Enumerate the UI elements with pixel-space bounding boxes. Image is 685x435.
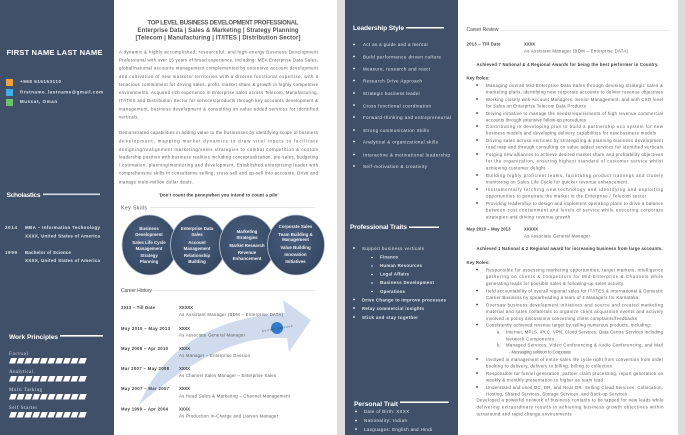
circle: business development: Management — [136, 246, 163, 251]
key roles list: Providing leadership to design and implement operating plans to drive a balance — [486, 201, 664, 206]
circle: corporate sales: Value Building — [280, 245, 311, 250]
role block: assistant manager: 2013 – Till Date — [466, 42, 501, 46]
key roles list: Carrier Business by spearheading a team of 4 Managers for Karnataka — [486, 295, 639, 300]
circle: business development: Strategy — [140, 253, 158, 258]
circle: marketing strategies: Revenue — [238, 250, 257, 255]
list: professional traits: Business Development — [380, 280, 435, 285]
key roles list: business models and developing delivery capabilities for new business models — [486, 130, 656, 136]
key skills circles — [122, 215, 324, 275]
key roles list: for Sales on Enterprise Telecom Data Products — [486, 104, 586, 108]
contact details: Muscat, Oman — [20, 99, 57, 104]
heading: professional traits — [350, 224, 439, 231]
career history timeline: XXXXX — [179, 305, 193, 310]
key roles list: Managed Services, Video Conferencing & Audio Conferencing, and Mail — [506, 342, 663, 348]
heading: personal trait: Personal Trait — [354, 401, 399, 408]
profile summary paragraph 1: tenacious commitment for driving sales, profit, market share & growth in highly competitive — [119, 82, 319, 87]
key roles list — [476, 83, 664, 220]
role block: assistant manager: Key Roles: — [466, 76, 490, 80]
key roles list: Developed a powerful network of business contacts to be tapped for new leads while — [476, 398, 664, 402]
key roles list: a. — [497, 330, 500, 334]
key roles list: Instrumentally fetching new technology and identifying and exploiting — [486, 187, 664, 192]
key roles list: Managing overall Mid-Enterprise Data Sales through devising strategic sales & — [486, 83, 663, 88]
career history timeline: May 2010 – May 2013 — [121, 326, 171, 331]
role block: associate general manager: Key Roles: — [466, 260, 490, 265]
key roles list: accounts through extensive follow-up procedures — [486, 118, 586, 122]
circle: corporate sales — [268, 215, 324, 275]
list: leadership style: Act as a guide and a mentor — [363, 42, 429, 47]
career history timeline: As Assistant Manager (BDM – Enterprise DATA) — [179, 312, 284, 317]
key roles list: Oversaw business development initiatives and source and created marketing — [486, 302, 664, 308]
key roles list: - Messaging solution to Corporate — [509, 350, 572, 354]
key roles list: for the organization, ensuring highest standard of customer service whilst — [486, 158, 664, 164]
title block — [136, 20, 300, 42]
profile summary paragraph 2: development, mapping market dynamics to draw vital inputs to facilitate — [119, 138, 319, 144]
list: leadership style: Cross functional coordination — [363, 104, 432, 108]
key roles list: achieving customer delight — [486, 166, 546, 170]
circle: enterprise data sales: Sales — [191, 232, 203, 237]
career history timeline: As Production In-Charge and Liaison Manager — [179, 414, 279, 418]
key roles list: b. — [497, 342, 500, 348]
key roles list: Network Components — [506, 336, 554, 342]
key roles list: monitoring on Sales Life Cycle for quicker revenue enhancement — [486, 180, 628, 184]
list: leadership style: Interactive & motivational leadership — [363, 152, 451, 158]
role block: associate general manager — [466, 226, 664, 416]
profile summary paragraph 1: management, business development & consulting on value added services for identified — [119, 106, 319, 112]
profile summary paragraph 1: A dynamic & highly accomplished, resourceful, and high-energy Business Development — [119, 50, 319, 54]
scholastics entries: 1999 — [5, 250, 18, 255]
profile summary paragraph 2 — [119, 130, 319, 184]
list: personal trait: Nationality: Indian — [364, 418, 408, 423]
career history timeline: As Head Sales & Marketing – Channel Management — [179, 394, 291, 398]
key roles list: strategies and driving revenue growth — [486, 214, 571, 220]
list: professional traits: Operations — [380, 289, 406, 294]
heading: career history: Career History — [121, 288, 152, 294]
list: professional traits: Support business verticals — [362, 246, 425, 251]
key roles list — [476, 268, 664, 416]
key roles list: Responsible for funnel generation, partner claim processing, report generation on — [486, 371, 664, 376]
career history timeline: XXXX — [179, 386, 190, 391]
list: personal trait — [355, 409, 432, 432]
contact details — [6, 79, 103, 106]
heading: professional traits: Professional Traits — [350, 224, 407, 231]
list: professional traits: Stick and stay together — [362, 315, 418, 320]
career history timeline: May 2008 – Apr 2010 — [121, 346, 169, 351]
profile summary paragraph 1: IT/ITES and Distribution Sector for services/products through key accounts development & — [119, 98, 318, 103]
profile summary paragraph 2: / estimation, planning/monitoring and development. Established enterprising leader with — [119, 162, 319, 168]
arrow: career progression — [139, 300, 311, 405]
profile summary paragraph 1: and cultivation of new markets/ territories with a diverse functional expertise, with a — [119, 74, 319, 79]
circle: corporate sales: Innovation — [284, 252, 307, 257]
key roles list: road map and through consulting on value added services for identified verticals — [486, 144, 663, 150]
key roles list: opportunities to penetrate the market in the Enterprise / Telecom sector — [486, 194, 647, 198]
circle: marketing strategies: Strategies — [236, 235, 258, 240]
list: leadership style — [353, 42, 451, 169]
career history timeline: XXXX — [179, 346, 190, 351]
contact details: +968 515153110 — [20, 79, 62, 84]
scholastics entries: XXXX, United States of America — [25, 234, 101, 238]
work principles rating bars: Multi Tasking — [9, 388, 42, 393]
list: leadership style: Research Drive Approach — [363, 78, 423, 84]
circle: enterprise data sales: Building — [188, 259, 206, 264]
list: professional traits: Human Resources — [380, 263, 423, 268]
list: professional traits: Finance — [380, 254, 399, 260]
circle: enterprise data sales: Enterprise Data — [181, 226, 214, 231]
title block: TOP LEVEL BUSINESS DEVELOPMENT PROFESSIONAL — [148, 20, 299, 26]
role block: assistant manager — [466, 42, 664, 220]
circle: business development: Planning — [140, 259, 159, 264]
role block: associate general manager: XXXXX — [524, 226, 538, 232]
scholastics entries: XXXX, United States of America — [25, 258, 101, 263]
career history timeline: As Associate General Manager — [179, 332, 246, 338]
key roles list: Driving sales across verticals by strategizing & planning business development — [486, 138, 664, 143]
key roles list: Building highly proficient teams, facilitating product trainings and closely — [486, 173, 664, 178]
key roles list: Working closely with Account Managers, Senior Management, and with CXO level — [486, 97, 663, 102]
circle: enterprise data sales: Management — [184, 246, 211, 251]
profile summary paragraph 2: Demonstrated capabilities in adding value to the businesses by identifying scope of business — [119, 130, 318, 135]
profile summary paragraph 2: manage multi-million dollar deals. — [119, 180, 193, 184]
circle: business development — [122, 215, 177, 275]
profile summary paragraph 2: designing/realignment marketing/sales strategies to combat competition & custom — [119, 147, 318, 152]
list: leadership style: Measure, research and react — [363, 66, 431, 72]
circle: corporate sales: Corporate Sales — [279, 224, 313, 229]
circle: business development: Business — [139, 226, 159, 231]
career history timeline: May 1999 – Apr 2004 — [121, 406, 169, 412]
career history timeline: May 2007 – Mar 2007 — [121, 386, 170, 391]
career history timeline: 2013 – Till Date — [121, 305, 156, 310]
role block: associate general manager: As Associate General Manager — [524, 234, 591, 238]
list: leadership style: Analytical & organizational skills — [363, 140, 439, 144]
list: leadership style: Strategic business leader — [363, 91, 421, 96]
quote: 'Don't count the pennywhen you intend to count a pile' — [158, 192, 278, 198]
key roles list: Driving initiative to manage the needs/requirements of high revenue commercial — [486, 111, 663, 116]
list: professional traits — [353, 246, 447, 320]
profile summary paragraph 1: Professional with over 15 years of broad experience, including: MEA Enterprise Data Sales, — [119, 58, 318, 62]
list: leadership style: Forward-thinking and entrepreneurial — [363, 115, 451, 120]
heading: personal trait — [354, 401, 449, 408]
career history timeline: XXXX — [179, 406, 190, 412]
work principles rating bars — [9, 352, 87, 418]
work principles rating bars: Factual — [9, 352, 29, 357]
title block: Enterprise Data | Sales & Marketing | Strategy Planning — [138, 28, 299, 34]
heading: leadership style — [353, 25, 444, 32]
circle: enterprise data sales: Relationship — [184, 253, 210, 258]
circle: corporate sales: Team Building & — [278, 232, 313, 237]
list: personal trait: Date of Birth: XXXX — [364, 409, 409, 414]
circle: enterprise data sales: Account — [188, 240, 206, 245]
key roles list: weekly & monthly presentation to higher as team lead — [486, 378, 604, 382]
profile summary paragraph 2: leadership position with business realities including conceptualization, pre-sales, budgeting — [119, 154, 319, 160]
panel: right page sidebar — [345, 0, 458, 435]
scholastics entries: 2014 — [5, 225, 18, 230]
heading: work principles — [9, 334, 103, 341]
circle: business development: Development — [135, 232, 163, 237]
list: leadership style: Strong communication Skills — [363, 128, 430, 133]
key roles list: Held accountability of overall regional sales for IT/ITES & International & Domestic — [486, 288, 664, 294]
circle: corporate sales: Initiatives — [285, 259, 306, 264]
key roles list: Hosting, Shared Services, Storage Services, and Back-up Services — [486, 392, 627, 396]
scholastics entries: MBA – Information Technology — [25, 225, 101, 230]
list: leadership style: Build performance driven culture — [363, 54, 442, 60]
profile summary paragraph 2: comprehensive skills in consultative selling, cross sell and up-sell into accounts, Drive and — [119, 170, 319, 176]
panel: left page sidebar — [0, 0, 114, 435]
contact details: firstname_lastname@gmail.com — [20, 90, 103, 94]
key roles list: Contributing in developing plan to build a partnership eco system for new — [486, 124, 664, 129]
key roles list: gathering on clients & competitors for Mid-Enterprise & Channels while — [486, 274, 664, 279]
career history timeline: As Manager – Enterprise Division — [179, 353, 251, 358]
career history timeline: XXXX — [179, 366, 190, 371]
list: professional traits: Relay commercial insights — [362, 306, 425, 311]
circle: marketing strategies — [220, 215, 274, 275]
heading: leadership style: Leadership Style — [353, 25, 404, 32]
key roles list: Internet, MPLS, IPLC, VPN, Cloud Services, Data Centre Services including — [506, 330, 664, 334]
work principles rating bars: Self Starter — [9, 406, 37, 411]
career history timeline — [121, 305, 291, 418]
circle: enterprise data sales — [170, 215, 226, 275]
key roles list: Involved in management of entire sales life cycle right from conversion from order — [486, 357, 664, 362]
work principles rating bars: Analytical — [9, 370, 34, 375]
circle: business development: Sales Life Cycle — [132, 240, 166, 245]
key roles list: marketing plans, identifying new corporate accounts to deliver revenue objectives — [486, 90, 663, 94]
icon: current position marker: Current Position — [261, 324, 293, 333]
profile summary paragraph 1 — [119, 50, 319, 120]
key roles list: Consistently achieved revenue target by selling numerous products, including: — [486, 322, 651, 328]
key roles list: Responsible for assessing marketing opportunities, target markets, intelligence — [486, 268, 664, 272]
circle: corporate sales: Management — [282, 237, 309, 242]
heading: scholastics: Scholastics — [6, 192, 41, 199]
key roles list: delivering extraordinary results in achieving business growth objectives within — [476, 404, 664, 410]
heading: career review: Career Review — [466, 27, 499, 33]
role block: assistant manager: As Assistant Manager (BDM – Enterprise DATA) — [524, 48, 629, 54]
list: personal trait: Languages: English and Hindi — [364, 427, 432, 432]
career history timeline: XXXX — [179, 326, 190, 331]
profile summary paragraph 1: environments. Acquired rich experience in Enterprise sales across Telecom, Manufacturing, — [119, 90, 318, 95]
key roles list: material and sales collaterals to organize client acquisition events and actively — [486, 309, 664, 314]
panel: right page main content — [458, 0, 678, 435]
achievement line: Achieved 7 National & 4 Regional Awards for being the best performer in Country. — [476, 62, 658, 67]
profile summary paragraph 1: global/national accounts management complemented by extensive account development — [119, 66, 319, 70]
circle: marketing strategies: Market Research — [229, 243, 265, 248]
achievement line: Achieved 1 National & 2 Regional award for increasing business from large accounts. — [476, 246, 662, 251]
key roles list: generating leads for possible sales & following-up sales activity — [486, 281, 624, 286]
key roles list: Understand and used DC, DR, and Near DR. Selling Cloud Services, Collocation, — [486, 385, 663, 390]
scholastics entries — [5, 225, 101, 263]
career history timeline: Mar 2007 – May 2008 — [121, 366, 170, 371]
list: professional traits: Drive Change to improve processes — [362, 298, 447, 302]
heading: scholastics — [6, 192, 100, 199]
key roles list: Forging new alliances to achieve desired market share and profitability objectives — [486, 152, 663, 157]
list: professional traits: Legal Affairs — [380, 272, 410, 276]
circle: marketing strategies: Marketing — [237, 229, 258, 234]
list: leadership style: Self-motivation & creativity — [363, 164, 428, 169]
name heading: FIRST NAME LAST NAME — [6, 48, 102, 57]
heading: work principles: Work Principles — [9, 334, 58, 341]
title block: [Telecom | Manufacturing | IT/ITES | Distribution Sector] — [136, 36, 300, 42]
career history timeline: As Channel Sales Manager – Enterprise Sales — [179, 373, 276, 378]
key roles list: between cost containment and levels of service while executing corporate — [486, 208, 664, 212]
role block: assistant manager: XXXX — [524, 42, 535, 46]
heading: key skills: Key Skills — [121, 206, 147, 212]
profile summary paragraph 1: verticals. — [119, 114, 139, 120]
key roles list: involved in policy discussions concerning client complaints/feedbacks — [486, 316, 637, 321]
scholastics entries: Bachelor of Science — [25, 250, 72, 255]
role block: associate general manager: May 2010 – May 2013 — [466, 226, 511, 232]
key roles list: turnaround and rapid change environments — [476, 412, 572, 416]
panel: left page main content — [114, 0, 337, 435]
key roles list: booking to delivery, delivery to billing, billing to collection — [486, 364, 613, 368]
circle: marketing strategies: Enhancement — [233, 256, 262, 261]
